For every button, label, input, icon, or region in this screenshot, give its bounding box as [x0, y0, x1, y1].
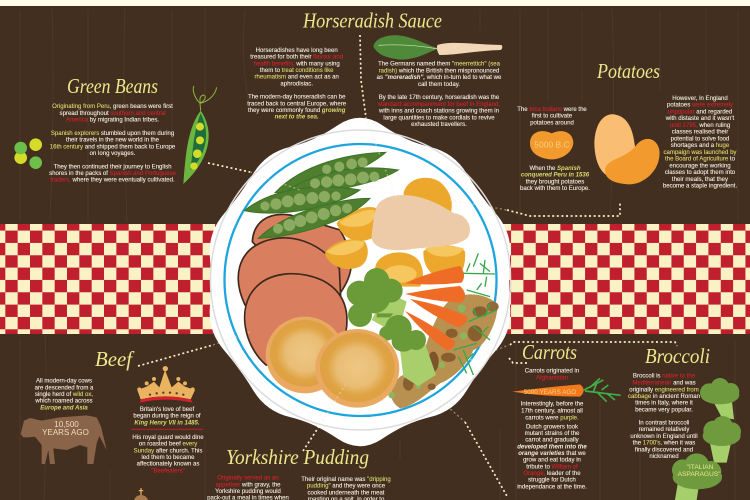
text: horseradish left: treasured for both their flavour and — [250, 55, 343, 61]
text: potatoes in england: campaign was launched by — [664, 150, 737, 156]
text: green beans history: on long voyages. — [90, 151, 136, 157]
callout: italian asparagus: ASPARAGUS". — [678, 471, 723, 478]
text: beef origins: Europe and Asia — [40, 405, 88, 411]
text: carrot history: Orange, leader of the — [523, 471, 581, 477]
text: potatoes in england — [663, 96, 737, 190]
icon: beefeater hat — [134, 488, 148, 500]
text: potatoes intro: first to cultivate — [532, 114, 573, 120]
text: yorkshire left: Originally served as an — [217, 476, 279, 482]
text: yorkshire right: pudding" and they were once — [307, 484, 386, 490]
callout: 10,500 years ago: 10,500 — [54, 420, 79, 429]
text: spanish conquest — [520, 166, 590, 192]
text: green beans history — [49, 104, 177, 184]
text: beefeaters: began during the reign of — [133, 414, 201, 420]
text: green beans history: their travels in the new world in the — [66, 138, 160, 144]
text: potatoes intro: The Inca Indians were the — [517, 107, 587, 113]
text: potatoes in england: potential to solve food — [671, 136, 729, 142]
text: potatoes in england: with distaste and it wasn't — [665, 116, 735, 122]
text: broccoli history: Mediterranean and was — [632, 381, 696, 387]
heading: beef: Beef — [95, 347, 135, 371]
icon: pea pod — [183, 86, 217, 184]
text: beefeaters: affectionately known as — [137, 462, 199, 468]
text: horseradish left: aphrodisiac. — [280, 81, 313, 87]
text: beef origins — [34, 379, 94, 411]
panel: horseradish sauce — [247, 9, 502, 128]
text: carrot history: orange varieties that we — [518, 451, 586, 457]
callout: 10,500 years ago — [42, 420, 89, 437]
panel: yorkshire pudding — [207, 445, 391, 500]
heading: potatoes: Potatoes — [596, 59, 660, 83]
text: carrot history: grow and eat today in — [523, 458, 581, 464]
text: potatoes in england: potatoes were extremely — [667, 103, 734, 109]
text: horseradish left: rheumatism and even act as an — [255, 75, 339, 81]
text: green beans history: spread throughout southern and central — [60, 111, 165, 117]
text: horseradish left: health benefits, with many using — [254, 61, 340, 67]
text: carrot history — [517, 402, 587, 490]
text: potatoes in england: encourage the working — [669, 163, 731, 169]
heading: green beans: Green Beans — [67, 74, 158, 98]
text: beef origins: are descended from a — [35, 385, 94, 391]
text: potatoes in england: shortages and a huge — [671, 143, 730, 149]
text: carrot origin: Afghanistan — [536, 375, 568, 381]
text: yorkshire left — [207, 476, 289, 500]
text: beef origins: which roamed across — [34, 399, 93, 405]
text: beef origins: single herd of wild ox, — [35, 392, 93, 398]
text: beefeaters: Sunday after church. This — [134, 448, 202, 454]
callout: 5000 years ago: 5000 YEARS AGO — [524, 389, 576, 396]
text: potatoes intro — [517, 107, 587, 126]
text: potatoes in england: classes realised their — [672, 130, 728, 136]
text: beefeaters: "Beefeaters" — [151, 468, 185, 474]
top cream strip — [0, 0, 750, 6]
text: potatoes in england: become a staple ingredient. — [663, 184, 737, 190]
text: beefeaters: King Henry VII in 1485. — [134, 420, 200, 426]
text: horseradish left: traced back to central Europe, where — [247, 101, 347, 107]
callout: 5000 B.C: 5000 B.C — [534, 140, 570, 150]
text: broccoli history: remained relatively — [639, 427, 690, 433]
callout: 10,500 years ago: YEARS AGO — [42, 428, 89, 437]
text: carrot history: 17th century, almost all — [521, 408, 583, 414]
panel: potatoes — [517, 59, 737, 192]
roast potatoes — [325, 178, 465, 287]
text: potatoes in england: However, in England — [672, 96, 728, 102]
text: spanish conquest: When the Spanish — [529, 166, 581, 172]
icon: horseradish — [373, 35, 502, 59]
text: carrot history: struggle for Dutch — [528, 478, 576, 484]
icon: crown — [137, 366, 195, 403]
text: horseradish right: standard accompaniment for beef in England, — [378, 102, 500, 108]
text: potatoes in england: until 1795, when ruling — [670, 123, 730, 129]
text: broccoli history: unknown in England until — [630, 434, 698, 440]
text: broccoli history: the 1700's, when it was — [633, 441, 695, 447]
text: green beans history: Spanish explorers stumbled upon them during — [51, 131, 174, 137]
text: broccoli history: In contrast broccoli — [639, 420, 689, 426]
panel: beef — [21, 347, 204, 500]
text: carrot origin: Carrots originated in — [525, 369, 579, 375]
text: carrot history: tribute to William of — [526, 464, 578, 470]
text: beef origins: All modern-day cows — [36, 379, 92, 385]
panel: carrots — [512, 340, 621, 490]
text: carrot history: carrot and gradually — [525, 438, 580, 444]
text: broccoli history: became very popular. — [635, 407, 693, 413]
text: broccoli history: Broccoli is native to the — [633, 374, 696, 380]
text: broccoli history: finally discovered and — [635, 447, 693, 453]
icon: carrot — [512, 378, 621, 402]
text: carrot history: Interestingly, before the — [521, 402, 584, 408]
text: beefeaters: led them to became — [141, 455, 195, 461]
text: carrot history: carrots were purple. — [525, 415, 579, 421]
text: green beans history: traders, where they were eventually cultivated. — [50, 178, 175, 184]
icon: peas — [14, 138, 42, 169]
text: potatoes in england: the Board of Agriculture to — [665, 157, 736, 163]
text: green beans history: They then continued their journey to English — [54, 164, 172, 170]
text: horseradish left: them to treat conditions like — [260, 68, 334, 74]
text: horseradish right: The Germans named them "meerrettich" (sea — [378, 61, 501, 67]
text: beefeaters: on roasted beef every — [139, 442, 198, 448]
text: horseradish right: large quantities to make cordials to revive — [383, 115, 495, 121]
text: potatoes in england: classes to adopt them into — [665, 170, 736, 176]
text: carrot history: developed them into the — [517, 444, 587, 450]
text: green beans history: Originating from Peru, green beans were first — [52, 104, 173, 110]
heading: yorkshire pudding: Yorkshire Pudding — [226, 445, 369, 469]
icon: cow — [21, 415, 107, 464]
text: broccoli history: nicknamed — [649, 454, 679, 460]
heading: carrots: Carrots — [522, 340, 577, 364]
peas — [260, 157, 379, 234]
panel: green beans — [14, 74, 217, 184]
text: horseradish right: exhausted travellers. — [411, 122, 467, 128]
text: yorkshire left: Yorkshire pudding would — [215, 489, 281, 495]
text: beefeaters: Britain's love of beef — [140, 407, 194, 413]
text: beefeaters: His royal guard would dine — [132, 435, 204, 441]
tablecloth checker band — [0, 224, 750, 334]
text: spanish conquest: conquered Peru in 1536 — [521, 173, 590, 179]
text: broccoli history: originally engineered from — [629, 387, 699, 393]
text: horseradish right — [377, 61, 502, 128]
callout: italian asparagus: "ITALIAN — [687, 464, 714, 471]
text: horseradish right: with inns and coach stations growing them in — [378, 109, 499, 115]
text: spanish conquest: back with them to Europe. — [520, 186, 590, 192]
dotted connector lines — [138, 35, 677, 498]
text: green beans history: America by migrating Indian tribes. — [66, 118, 159, 124]
text: green beans history: 16th century and shipped them back to Europe — [50, 144, 176, 150]
callout: italian asparagus — [678, 464, 723, 478]
text: yorkshire left: appetiser with gravy, the — [215, 482, 281, 488]
text: horseradish right: call them today. — [418, 82, 460, 88]
text: yorkshire right — [301, 477, 391, 500]
stuffing — [388, 294, 499, 408]
callout: 5000 B.C — [530, 131, 573, 159]
text: spanish conquest: they brought potatoes — [526, 179, 584, 185]
text: broccoli history: cabbage in ancient Roman — [628, 394, 700, 400]
gravy — [372, 195, 470, 250]
text: potatoes in england: their meals, that they — [672, 177, 729, 183]
text: horseradish left — [247, 48, 347, 121]
text: horseradish left: they were commonly found growing — [248, 108, 346, 114]
text: horseradish right: radish) which the British then mispronounced — [379, 68, 499, 74]
text: carrot history: Dutch growers took — [526, 424, 579, 430]
faint dotted lines over plate — [213, 118, 509, 425]
text: horseradish left: The modern-day horseradish can be — [248, 95, 346, 101]
icon: broccoli — [672, 378, 741, 500]
text: broccoli history: times in Italy, where it — [635, 401, 693, 407]
text: carrot origin — [525, 369, 579, 381]
text: broccoli history — [628, 374, 700, 460]
text: carrot history: independance at the time. — [517, 484, 587, 490]
text: potatoes intro: potatoes around — [530, 120, 574, 126]
text: potatoes in england: unpopular and regarded — [668, 109, 732, 115]
broccoli — [347, 268, 436, 386]
icon: potatoes — [594, 114, 660, 184]
text: beefeaters — [131, 407, 204, 474]
yorkshire puddings — [266, 317, 399, 408]
panel: broccoli — [628, 344, 741, 500]
text: green beans history: shores in the packs of Spanish and Portuguese — [49, 171, 177, 177]
text: carrot history: mutant strains of the — [525, 431, 580, 437]
carrots — [405, 253, 497, 375]
plate food — [238, 152, 499, 408]
text: horseradish left: Horseradishes have long been — [256, 48, 338, 54]
text: yorkshire right: Their original name was "dripping — [301, 477, 391, 483]
text: yorkshire right: cooked underneath the meat — [308, 490, 385, 496]
meat slices — [238, 214, 351, 365]
text: horseradish left: next to the sea. — [275, 115, 319, 121]
plate — [210, 118, 510, 446]
green bean pods — [244, 152, 398, 238]
text: horseradish right: By the late 17th century, horseradish was the — [379, 95, 500, 101]
text: horseradish right: as "moreradish", which in-turn led to what we — [377, 75, 502, 81]
heading: horseradish sauce: Horseradish Sauce — [302, 9, 442, 33]
heading: broccoli: Broccoli — [645, 344, 710, 368]
